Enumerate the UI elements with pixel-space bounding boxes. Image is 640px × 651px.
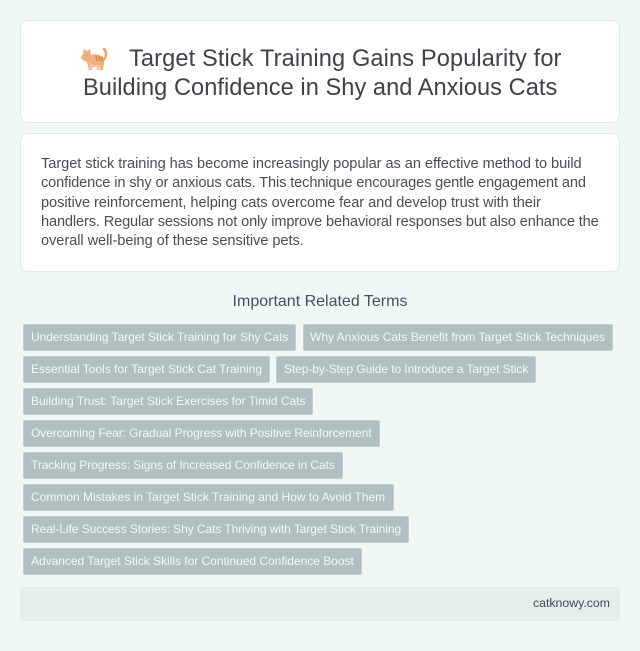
chip 6	[23, 420, 380, 447]
chip 5	[23, 388, 313, 415]
footer source: catknowy.com	[533, 596, 610, 610]
summary text: positive reinforcement, helping cats overcome fear and develop trust with their	[41, 195, 541, 211]
chip 8	[23, 484, 394, 511]
chip 4	[276, 356, 536, 383]
chip 9	[23, 516, 409, 543]
chip 4: Step-by-Step Guide to Introduce a Target Stick	[284, 362, 528, 376]
title	[83, 46, 562, 101]
chip 2: Why Anxious Cats Benefit from Target Stick Techniques	[310, 330, 605, 344]
chip 8: Common Mistakes in Target Stick Training and How to Avoid Them	[31, 490, 385, 504]
chip 10	[23, 548, 362, 575]
summary text: confidence in shy or anxious cats. This technique encourages gentle engagement and	[41, 175, 586, 191]
chip 3: Essential Tools for Target Stick Cat Training	[31, 362, 262, 376]
chip 3	[23, 356, 270, 383]
chip 7: Tracking Progress: Signs of Increased Confidence in Cats	[31, 458, 335, 472]
chip 1	[23, 324, 296, 351]
panel: title card	[20, 20, 620, 123]
footer bar	[20, 587, 620, 621]
chip 1: Understanding Target Stick Training for Shy Cats	[31, 330, 288, 344]
icon: cat	[81, 48, 108, 70]
chip 6: Overcoming Fear: Gradual Progress with Positive Reinforcement	[31, 426, 372, 440]
related terms chips	[23, 324, 613, 575]
chip 9: Real-Life Success Stories: Shy Cats Thriving with Target Stick Training	[31, 522, 401, 536]
panel: summary card	[20, 133, 620, 272]
chip 2	[303, 324, 613, 351]
chip 5: Building Trust: Target Stick Exercises for Timid Cats	[31, 394, 306, 408]
summary text: Target stick training has become increasingly popular as an effective method to build	[41, 156, 582, 172]
title: Building Confidence in Shy and Anxious Cats	[83, 75, 557, 101]
chip 7	[23, 452, 343, 479]
chip 10: Advanced Target Stick Skills for Continued Confidence Boost	[31, 554, 354, 568]
summary text: handlers. Regular sessions not only improve behavioral responses but also enhance the	[41, 214, 599, 230]
summary text	[41, 156, 599, 249]
heading: related terms: Important Related Terms	[233, 293, 407, 310]
title: Target Stick Training Gains Popularity for	[129, 46, 562, 72]
summary text: overall well-being of these sensitive pets.	[41, 233, 304, 249]
